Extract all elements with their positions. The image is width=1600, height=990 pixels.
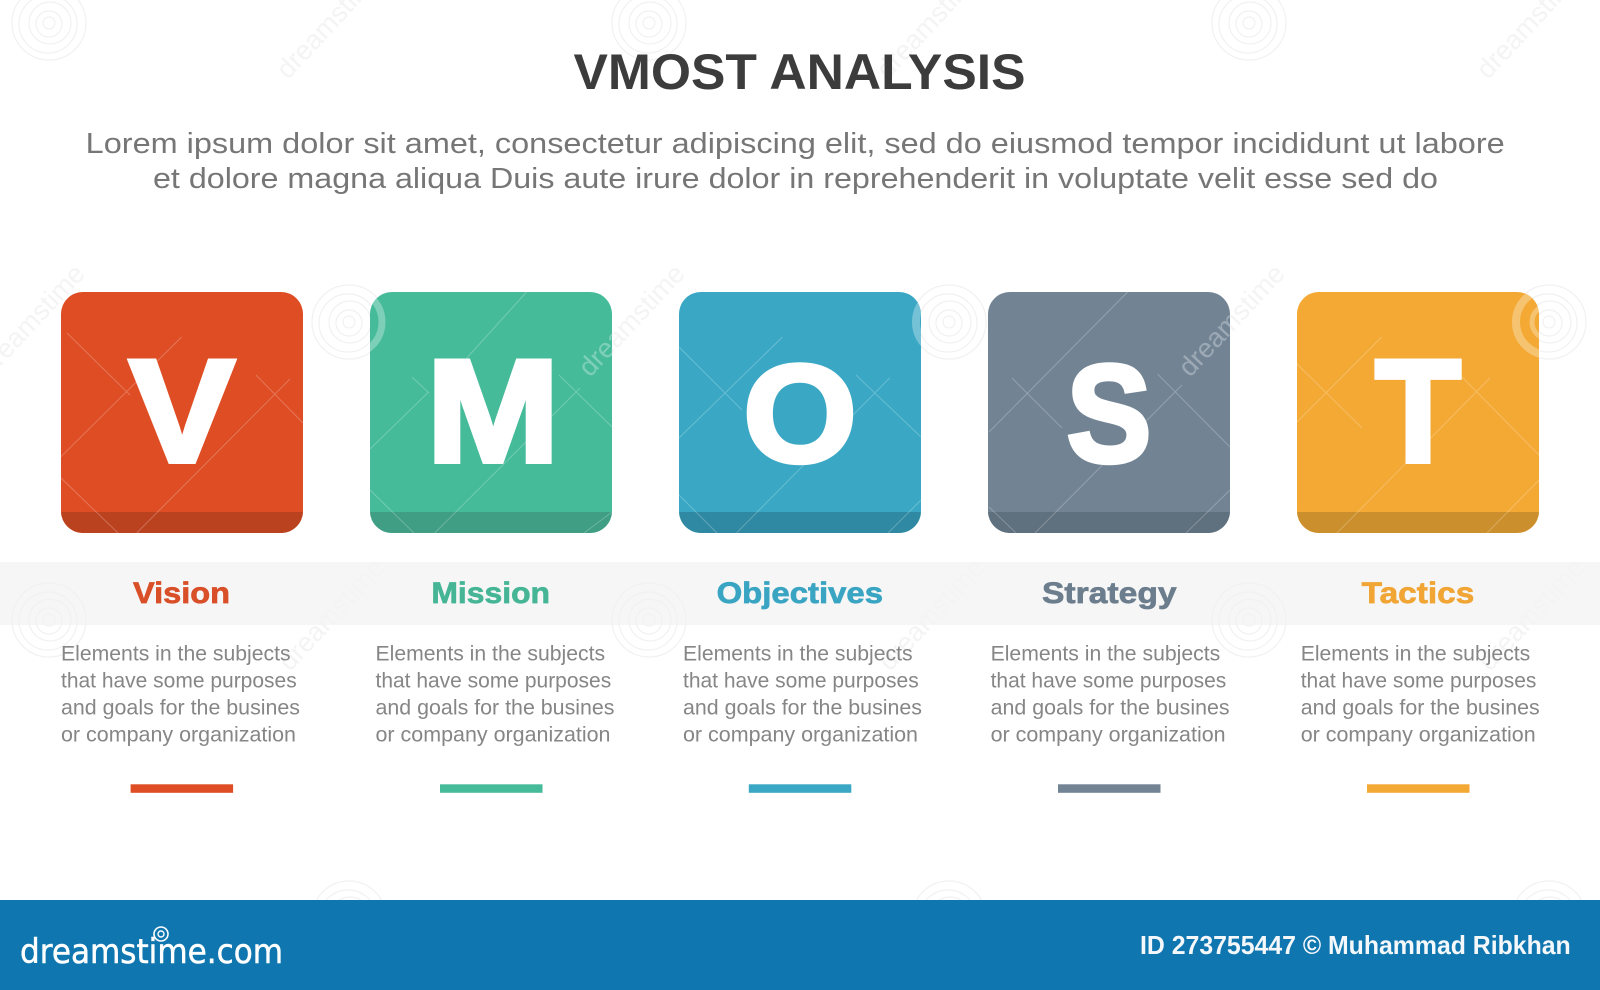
watermark pattern: dreamstime (1172, 258, 1291, 382)
text block: tactics description: that have some purposes (1301, 669, 1536, 693)
text block: objectives description: and goals for the busines (683, 696, 922, 720)
panel: strategy card (988, 292, 1230, 533)
label: Mission: Mission (431, 577, 550, 610)
text block: objectives description: that have some purposes (683, 669, 919, 693)
panel: vision card (61, 292, 303, 533)
text block: vision description: or company organization (61, 723, 296, 747)
text block: objectives description: Elements in the subjects (683, 642, 913, 666)
text block: objectives description: or company organization (683, 723, 918, 747)
subtitle: et dolore magna aliqua Duis aute irure dolor in reprehenderit in voluptate velit esse sed do (153, 163, 1438, 195)
watermark overlay on cards: dreamstime (572, 258, 691, 382)
accent bar: objectives (749, 784, 851, 793)
text block: vision description: Elements in the subjects (61, 642, 291, 666)
label: Vision: Vision (133, 577, 230, 610)
letter V: V (129, 330, 235, 493)
text block: strategy description: that have some purposes (991, 669, 1226, 693)
text block: mission description: or company organization (376, 723, 610, 747)
letter M: M (426, 330, 560, 493)
accent bar: mission (440, 784, 542, 793)
text block: mission description (376, 642, 614, 747)
logo: dreamstime: dreamstime.com (20, 932, 283, 972)
text block: objectives description (683, 642, 922, 747)
text block: tactics description: and goals for the busines (1301, 696, 1540, 720)
panel: tactics card (1297, 292, 1539, 533)
accent bar: tactics (1367, 784, 1470, 793)
watermark pattern: dreamstime (272, 552, 391, 676)
text block: strategy description: Elements in the subjects (991, 642, 1220, 666)
text block: strategy description: or company organization (991, 723, 1226, 747)
watermark pattern: dreamstime (872, 552, 991, 676)
text block: tactics description: Elements in the subjects (1301, 642, 1530, 666)
text block: mission description: and goals for the busines (376, 696, 614, 720)
label: Tactics: Tactics (1362, 577, 1474, 610)
text block: tactics description (1301, 642, 1540, 747)
panel: objectives card (679, 292, 921, 533)
watermark overlay on cards (370, 294, 1539, 376)
background band behind labels (0, 562, 1600, 625)
text block: vision description: and goals for the busines (61, 696, 300, 720)
title: VMOST ANALYSIS (574, 44, 1026, 100)
text block: vision description (61, 642, 300, 747)
watermark pattern: dreamstime (572, 258, 691, 382)
subtitle: Lorem ipsum dolor sit amet, consectetur adipiscing elit, sed do eiusmod tempor incididunt ut labore (86, 128, 1505, 160)
watermark overlay on cards: dreamstime (1172, 258, 1291, 382)
watermark pattern: dreamstime (1472, 552, 1591, 676)
text block: strategy description (991, 642, 1230, 747)
letter T: T (1375, 330, 1461, 493)
text block: strategy description: and goals for the busines (991, 696, 1230, 720)
text block: tactics description: or company organization (1301, 723, 1536, 747)
text block: mission description: Elements in the subjects (376, 642, 605, 666)
letter S: S (1067, 337, 1151, 492)
text block: vision description: that have some purposes (61, 669, 297, 693)
accent bar: strategy (1058, 784, 1160, 793)
label: Strategy: Strategy (1042, 577, 1177, 610)
letter O: O (743, 337, 857, 492)
footer bar (0, 900, 1600, 990)
text block: mission description: that have some purposes (376, 669, 611, 693)
accent bar: vision (131, 784, 233, 793)
subtitle (86, 128, 1505, 195)
label: Objectives: Objectives (717, 577, 883, 610)
panel: mission card (370, 292, 612, 533)
image credit: ID 273755447 © Muhammad Ribkhan (1140, 930, 1571, 960)
